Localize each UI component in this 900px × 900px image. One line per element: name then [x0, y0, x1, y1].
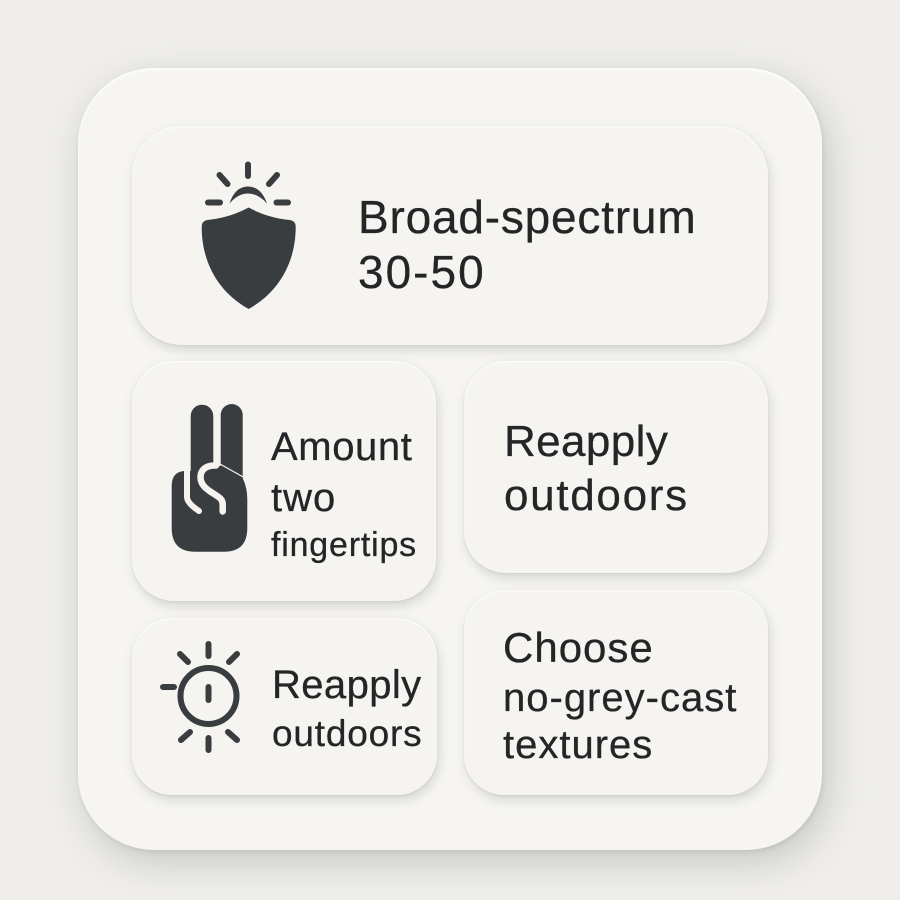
- text: reapply outdoors: [504, 417, 689, 520]
- text: outdoors: outdoors: [272, 713, 422, 754]
- text: fingertips: fingertips: [271, 526, 417, 564]
- text: 30-50: 30-50: [358, 246, 486, 298]
- heading: broad-spectrum: Broad-spectrum: [358, 191, 696, 243]
- text: reapply: Reapply: [272, 663, 422, 707]
- text: choose: Choose: [503, 624, 654, 671]
- panel: reapply sun card: [132, 618, 437, 795]
- panel: reapply outdoors card: [464, 361, 768, 573]
- text: no-grey-cast: no-grey-cast: [503, 676, 737, 720]
- panel: amount card: [132, 361, 436, 601]
- panel: textures card: [464, 590, 768, 795]
- text: amount: Amount: [271, 425, 412, 469]
- panel: main rounded board: [78, 68, 822, 850]
- text: outdoors: outdoors: [504, 471, 689, 520]
- text: two: two: [271, 476, 336, 520]
- text: reapply: Reapply: [504, 417, 668, 466]
- text: textures: textures: [503, 723, 653, 767]
- panel: broad-spectrum card: [132, 126, 768, 345]
